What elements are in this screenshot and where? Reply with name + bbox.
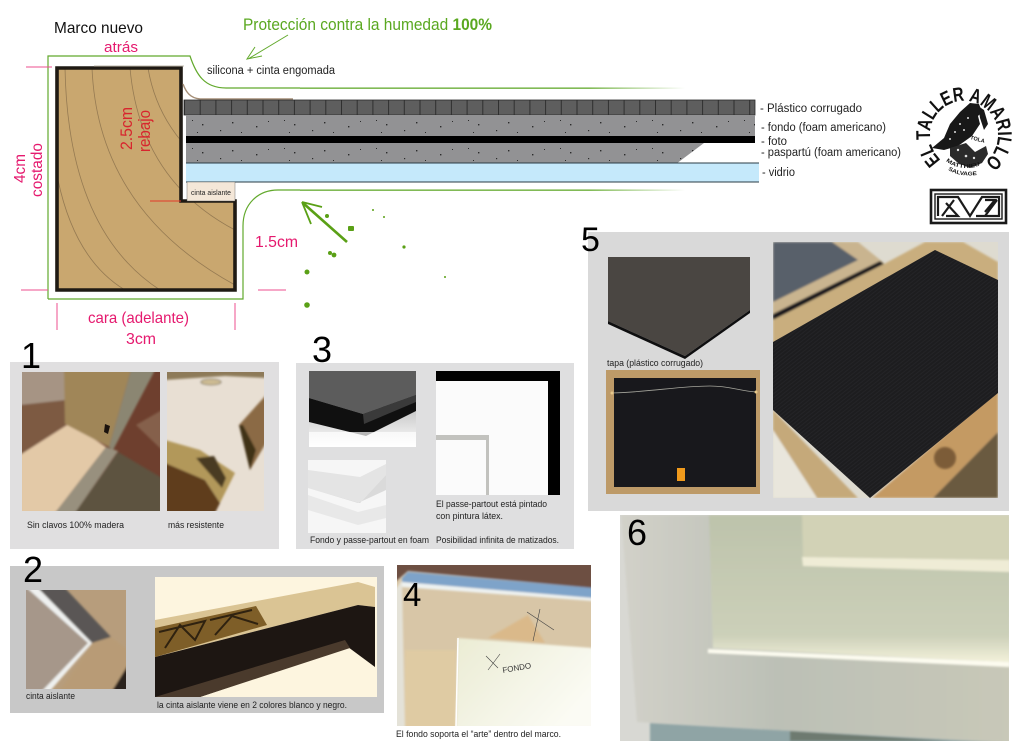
number 1: 1 (21, 335, 41, 376)
green arrow with splatter (302, 202, 446, 308)
photo: tape corner (26, 590, 126, 689)
layer: photo (186, 136, 755, 143)
caption: painted (436, 499, 547, 521)
layer: corrugated plastic (184, 100, 755, 115)
light strip (708, 649, 1010, 667)
layer: passe-partout foam (186, 143, 704, 162)
photo: white foam boards (308, 460, 386, 533)
heading: Marco nuevo: Marco nuevo (54, 20, 143, 37)
caption: cinta aislante: cinta aislante (26, 691, 75, 701)
photo: frame with tape (155, 577, 377, 697)
layer labels (760, 103, 901, 179)
logo ring text: EL TALLER AMARILLO (916, 88, 1012, 170)
label: 2.5cm rebajo: rebajo (135, 110, 154, 152)
green humidity protection outline (48, 56, 685, 299)
layer: glass (186, 163, 759, 182)
photo panel 6: finished frame corner (620, 515, 1009, 741)
frame body (621, 515, 1010, 743)
logo small text: MATTHIEU (946, 158, 980, 168)
layer labels: - Plástico corrugado (760, 103, 862, 115)
layer: backing foam (186, 115, 755, 136)
layer labels: - vidrio (762, 167, 795, 179)
photo: frame back close-up (773, 242, 998, 498)
technical diagram: frame cross-section (12, 15, 901, 348)
logo small text: SALVAGE (948, 167, 977, 176)
label: 4cm costado: costado (29, 143, 46, 197)
label: 2.5cm rebajo: 2.5cm (117, 107, 136, 150)
label: 4cm costado: 4cm (12, 154, 29, 183)
logo small text: TOLA (969, 135, 985, 145)
label: atrás: atrás (104, 39, 138, 56)
pink measurement guide lines (21, 67, 286, 330)
caption: tape colours: la cinta aislante viene en 2 colores blanco y negro. (157, 700, 347, 710)
number 6: 6 (627, 512, 647, 553)
photo: wood joint (22, 372, 160, 511)
caption: painted: El passe-partout está pintado (436, 499, 547, 509)
panel 3: foam (296, 363, 574, 549)
panel 1: no nails (10, 362, 279, 549)
number 3: 3 (312, 329, 332, 370)
number 4: 4 (403, 576, 421, 613)
logo small text (946, 135, 985, 176)
logo bird (932, 103, 988, 168)
caption: matting: Posibilidad infinita de matizados. (436, 535, 559, 545)
caption: tapa: tapa (plástico corrugado) (607, 358, 703, 368)
caption: painted: con pintura látex. (436, 511, 503, 521)
red rebate line (150, 200, 181, 202)
matte (709, 515, 1010, 662)
photo: frame back (606, 370, 760, 494)
label: 4cm costado (12, 143, 46, 197)
logo: meander mark (931, 190, 1006, 223)
layer labels: - paspartú (foam americano) (761, 147, 901, 159)
number 2: 2 (23, 549, 43, 590)
label: silicone and tape: silicona + cinta engomada (207, 65, 336, 77)
label: 2.5cm rebajo (117, 107, 154, 152)
arrow: to silicone (247, 35, 288, 59)
photo: joinery pieces (167, 372, 264, 511)
caption: foam: Fondo y passe-partout en foam (310, 535, 429, 545)
insulating tape box: cinta aislante (191, 188, 231, 197)
panel 2: insulating tape (10, 566, 384, 713)
layer labels: - foto (761, 136, 787, 148)
photo panel 4: backing inside frame (397, 565, 591, 726)
silicone bead (183, 84, 293, 99)
photo: painted passe-partout (436, 371, 560, 495)
caption: fondo: El fondo soporta el “arte” dentro del marco. (396, 729, 561, 739)
heading: humidity protection: Protección contra la humedad 100% (243, 15, 492, 34)
photo: corrugated sheet (608, 257, 750, 359)
inner window (802, 515, 1010, 560)
logo: El Taller Amarillo (916, 88, 1012, 176)
label: 1.5cm: 1.5cm (255, 234, 298, 251)
caption: más resistente: más resistente (168, 520, 224, 530)
label: cara adelante: cara (adelante) (88, 310, 189, 327)
label: 3cm: 3cm (126, 331, 156, 348)
layer labels: - fondo (foam americano) (761, 122, 886, 134)
panel 5: backing (588, 232, 1009, 511)
photo panel 4: backing inside frame: FONDO (502, 661, 532, 675)
caption: Sin clavos: Sin clavos 100% madera (27, 520, 124, 530)
wood profile (57, 66, 235, 290)
number 5: 5 (581, 221, 600, 259)
insulating tape box (187, 182, 235, 201)
photo: black foam (309, 371, 416, 447)
